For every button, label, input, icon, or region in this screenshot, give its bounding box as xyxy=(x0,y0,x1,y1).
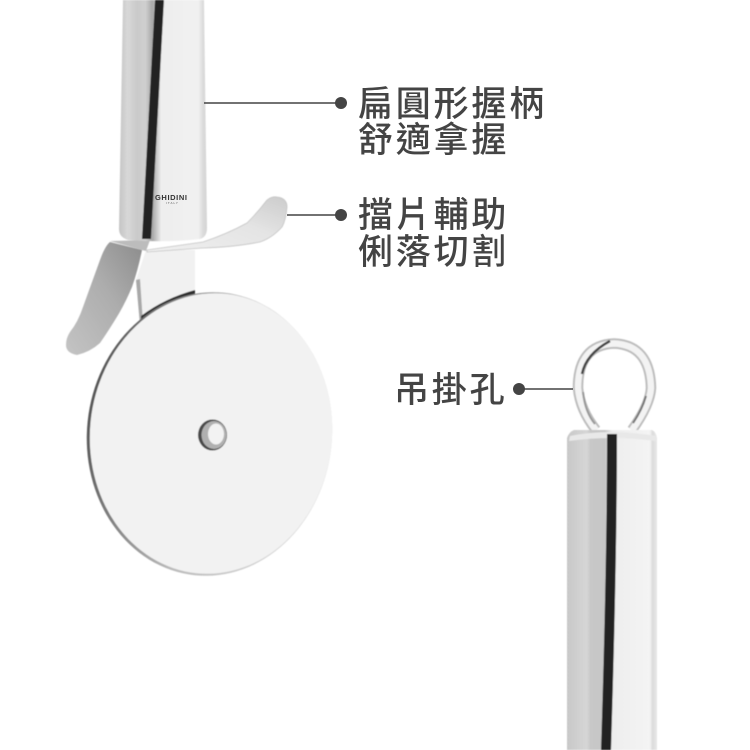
callout text xyxy=(358,85,547,160)
leader dot xyxy=(335,209,347,221)
brand mark xyxy=(155,193,188,205)
leader dot xyxy=(335,97,347,109)
second handle with hanging hole xyxy=(567,341,657,750)
handle dark stripe xyxy=(142,0,164,239)
brake tab: left xyxy=(66,242,142,355)
callout: hanging hole xyxy=(394,371,573,410)
callout text: 擋片輔助 xyxy=(358,196,509,235)
leader line xyxy=(287,214,340,216)
wheel rivet xyxy=(198,420,227,450)
callout text: 俐落切割 xyxy=(358,233,509,272)
callout text: 舒適拿握 xyxy=(358,121,509,160)
leader line xyxy=(520,388,573,390)
handle body xyxy=(567,430,657,750)
handle xyxy=(119,0,207,241)
callout text xyxy=(358,196,509,272)
handle dark stripe xyxy=(601,434,617,750)
brake tab: right xyxy=(147,197,287,252)
hanging ring xyxy=(578,341,651,430)
callout: flat handle xyxy=(204,85,547,160)
callout text: 吊掛孔 xyxy=(394,371,507,410)
cutting wheel xyxy=(73,280,346,588)
brand subtext: ITALY xyxy=(166,201,179,205)
pizza cutter xyxy=(66,0,346,588)
handle cap highlight xyxy=(569,432,656,441)
brand text: GHIDINI xyxy=(155,193,188,202)
leader dot xyxy=(513,383,525,395)
blade arm xyxy=(136,250,195,325)
brake tab junction xyxy=(110,240,150,251)
callout: guard xyxy=(287,196,509,272)
callout text: 扁圓形握柄 xyxy=(358,85,547,124)
leader line xyxy=(204,102,340,104)
